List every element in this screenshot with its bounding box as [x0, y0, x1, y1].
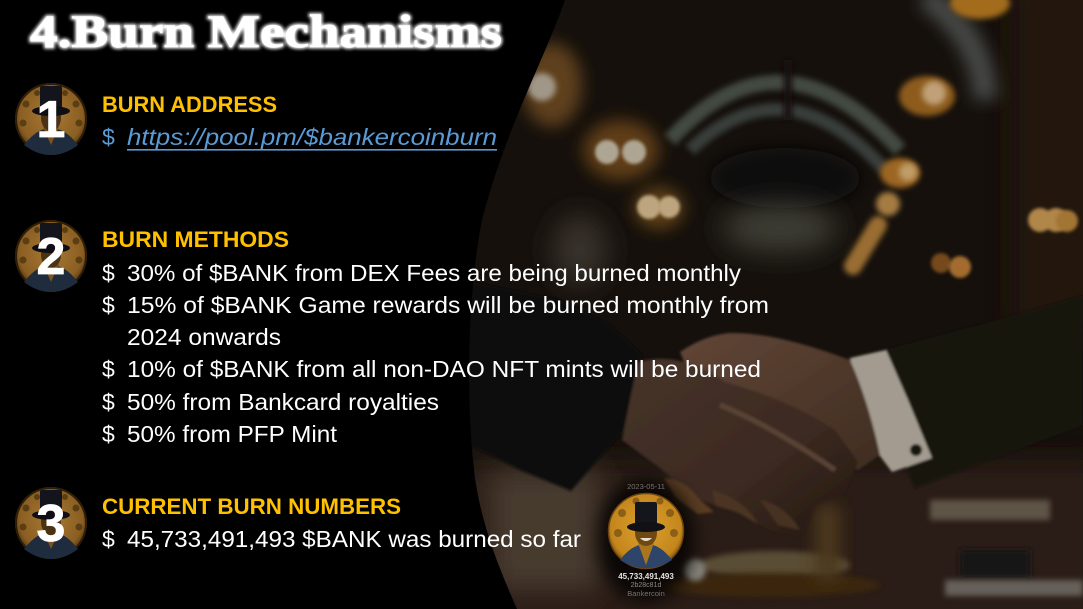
- badge 1: [15, 83, 87, 155]
- list of burn methods: 15% of $BANK Game rewards will be burned monthly from: [127, 292, 769, 318]
- NFT burn token card: 2b28c81d: [631, 582, 661, 589]
- badge 3: [15, 487, 87, 559]
- restaurant tables: blurred foreground: [460, 460, 1083, 609]
- right sleeve: [885, 296, 1083, 488]
- list of burn methods: $: [102, 356, 115, 382]
- section 3: current burn numbers: [15, 487, 581, 559]
- badge 1: 1: [37, 91, 65, 149]
- left sleeve: [460, 280, 642, 491]
- handshake: [460, 280, 1083, 537]
- badge 2: 2: [37, 228, 65, 286]
- list of burn methods: 30% of $BANK from DEX Fees are being burned monthly: [127, 260, 742, 286]
- heading: burn address: BURN ADDRESS: [102, 92, 277, 117]
- section 1: burn address: [15, 83, 497, 155]
- token coin artwork: [608, 494, 684, 568]
- NFT burn token card: [598, 478, 694, 602]
- link: burn address url: $: [102, 124, 115, 150]
- NFT burn token card: 2023-05-11: [627, 482, 665, 491]
- list of burn methods: 10% of $BANK from all non-DAO NFT mints will be burned: [127, 356, 761, 382]
- badge 2: [15, 220, 87, 292]
- title: 4.Burn Mechanisms: [30, 6, 502, 58]
- burned amount: 45,733,491,493 $BANK was burned so far: [127, 526, 581, 552]
- shirt cuff: [850, 350, 932, 472]
- list of burn methods: $: [102, 421, 115, 447]
- lamps: warm bokeh lights: [522, 0, 1078, 278]
- heading: current burn numbers: CURRENT BURN NUMBERS: [102, 494, 401, 519]
- list of burn methods: 50% from Bankcard royalties: [127, 389, 439, 415]
- title: 4.Burn Mechanisms: [30, 6, 502, 58]
- list of burn methods: 2024 onwards: [127, 324, 281, 350]
- list of burn methods: [102, 260, 769, 447]
- link: burn address url: https://pool.pm/$bankercoinburn: [127, 124, 497, 150]
- heading: burn methods: BURN METHODS: [102, 227, 289, 252]
- burned amount: $: [102, 526, 115, 552]
- list of burn methods: 50% from PFP Mint: [127, 421, 338, 447]
- section 2: burn methods: [15, 220, 769, 447]
- badge 3: 3: [37, 495, 65, 553]
- black left panel with curved edge: [0, 0, 565, 609]
- list of burn methods: $: [102, 260, 115, 286]
- left hand: [622, 359, 858, 537]
- list of burn methods: $: [102, 389, 115, 415]
- list of burn methods: $: [102, 292, 115, 318]
- NFT burn token card: Bankercoin: [627, 589, 665, 598]
- NFT burn token card: 45,733,491,493: [618, 572, 674, 581]
- right hand: [680, 333, 880, 470]
